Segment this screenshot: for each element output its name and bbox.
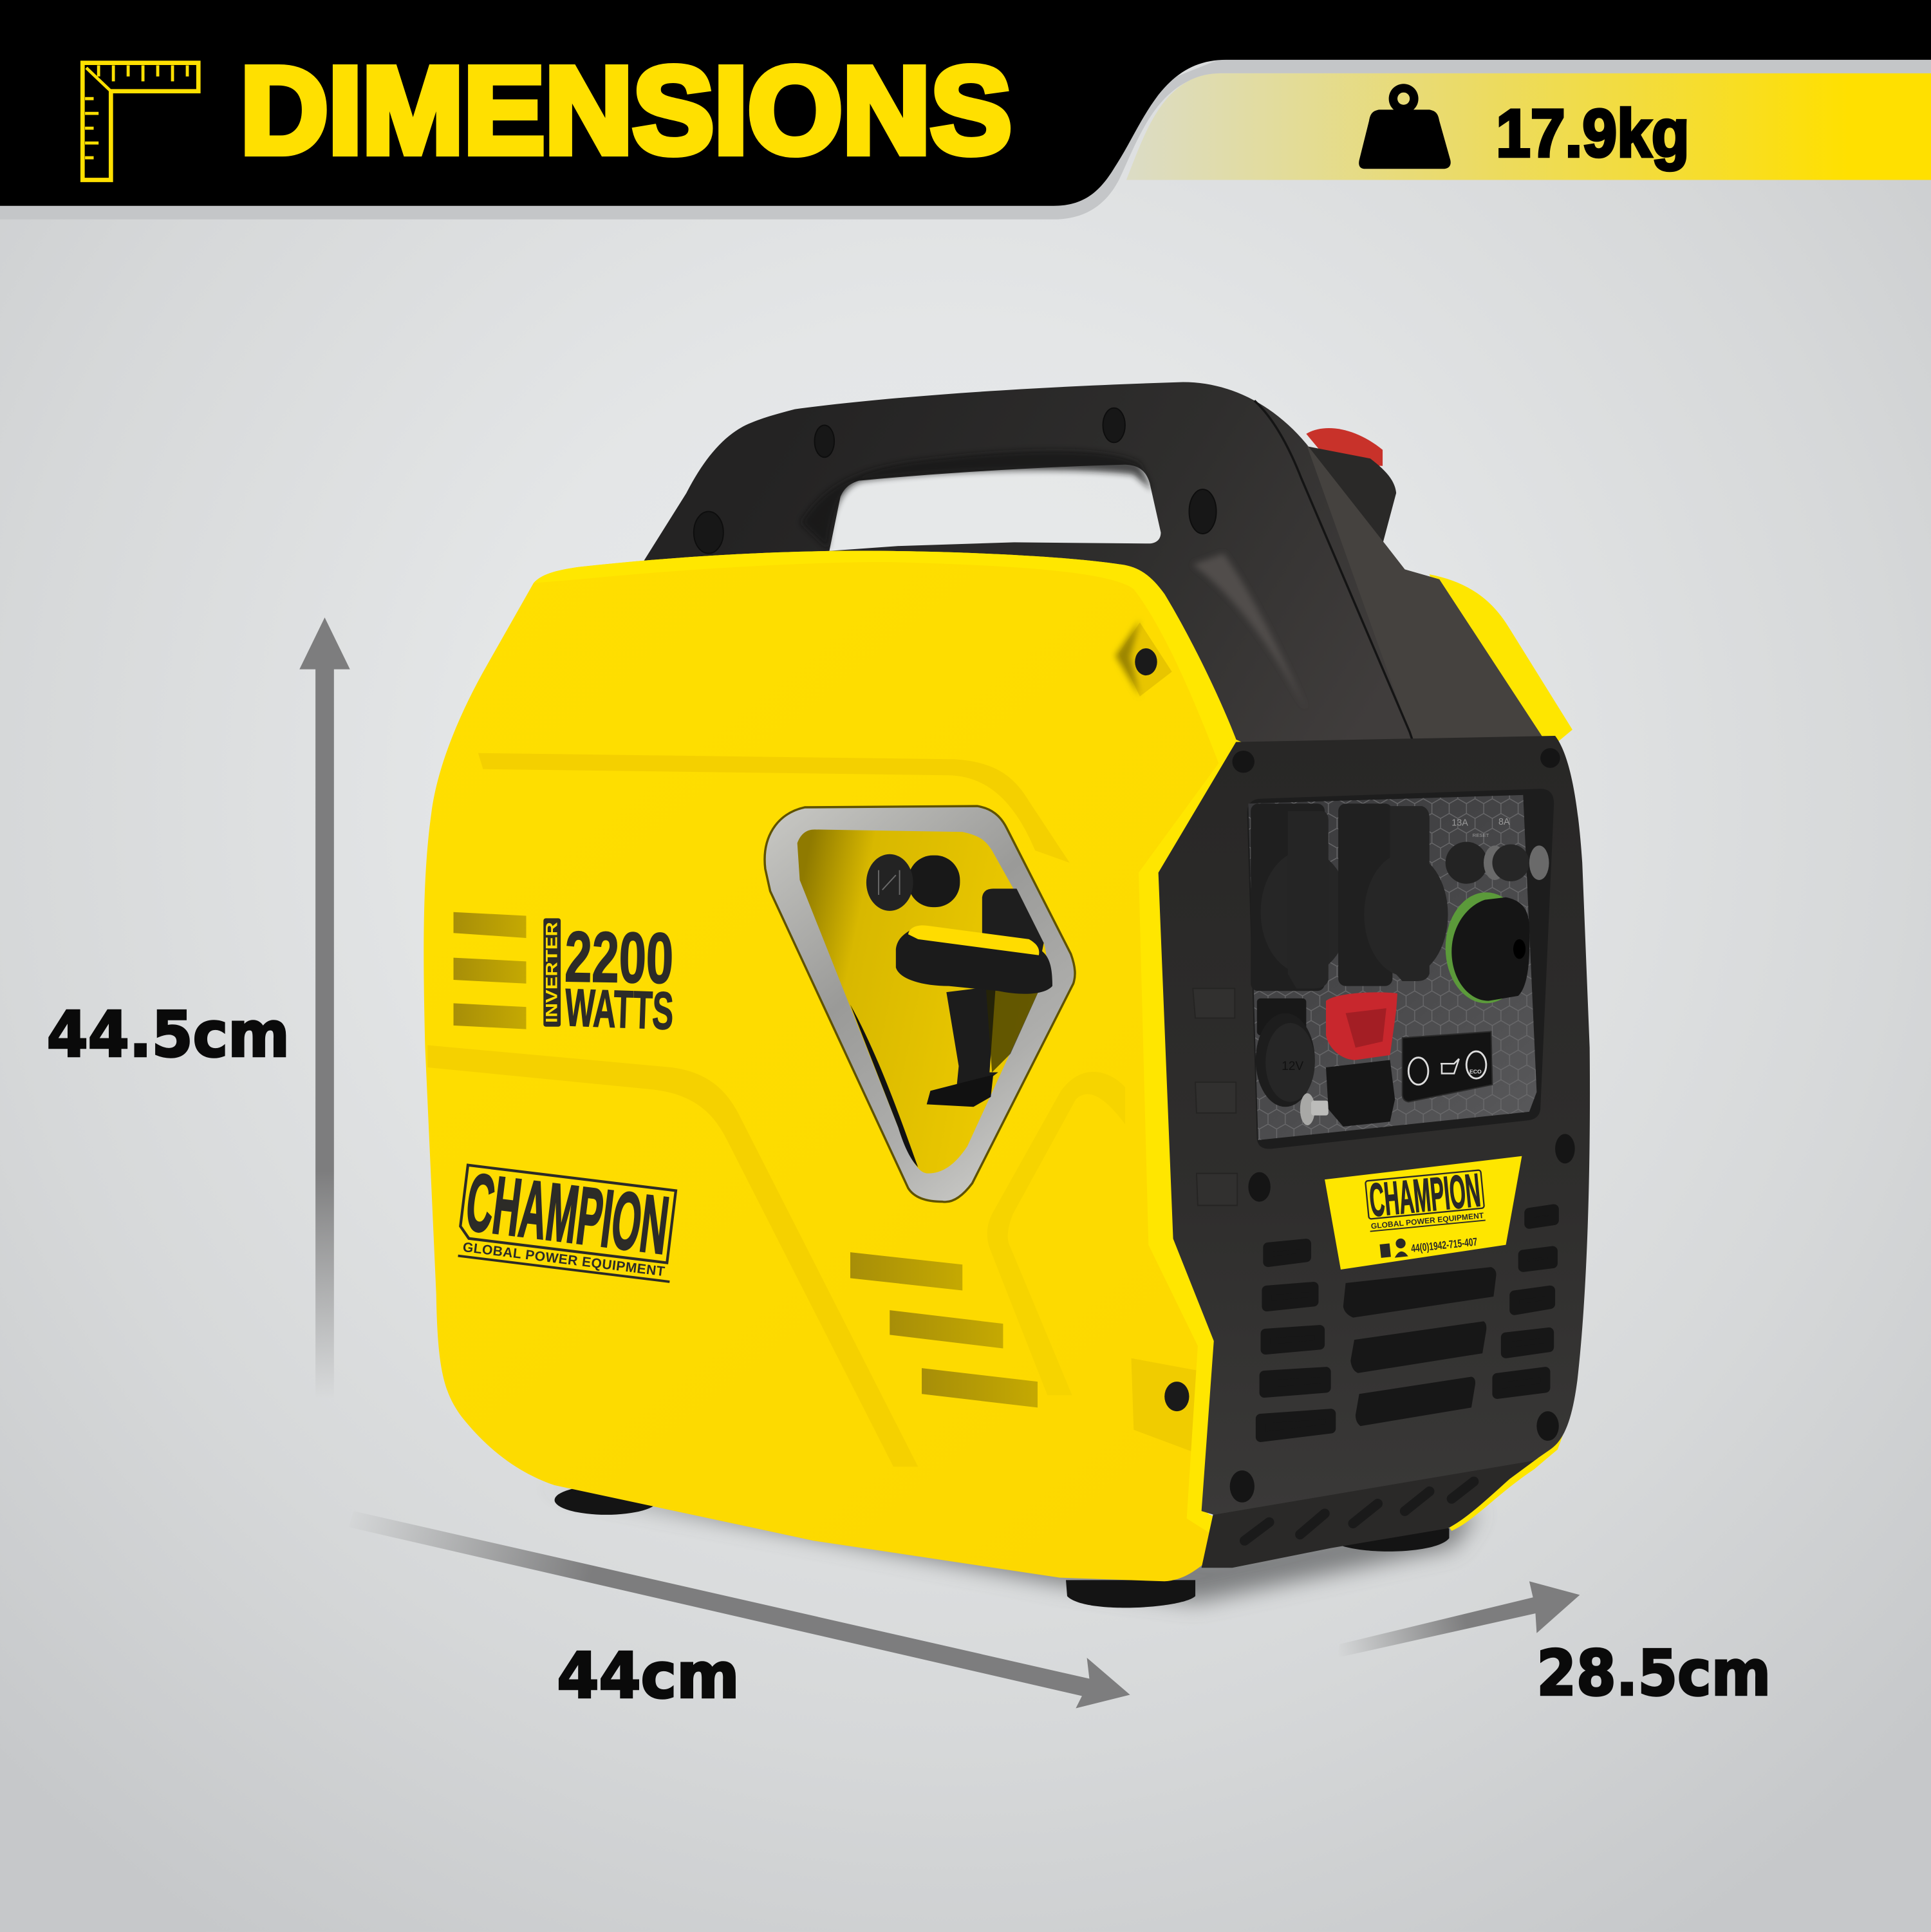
breaker knobs: RESET bbox=[1473, 832, 1489, 838]
panel screws bbox=[1230, 748, 1575, 1503]
bracket behind pull handle bbox=[982, 888, 1044, 955]
inverter badge: INVERTER bbox=[543, 922, 561, 1023]
upper rear housing bbox=[1306, 444, 1549, 747]
arrow: height bbox=[299, 617, 350, 1399]
screw boss upper bbox=[1115, 620, 1172, 697]
red stop button bbox=[1294, 428, 1396, 579]
label: width: 44cm bbox=[557, 1639, 740, 1712]
arrow: depth bbox=[1337, 1581, 1580, 1658]
arrow: width bbox=[349, 1511, 1130, 1708]
floor shadow bbox=[542, 1485, 1479, 1602]
red parallel cap bbox=[1326, 992, 1397, 1060]
rear yellow shell top bbox=[1430, 574, 1572, 742]
window inner shadow bbox=[850, 1004, 918, 1167]
indicator panel: ECO bbox=[1469, 1069, 1482, 1075]
icon: weight bbox=[1359, 84, 1451, 169]
bright edge strip bbox=[1139, 740, 1247, 1535]
front vents left column bbox=[1261, 1244, 1331, 1437]
header black panel bbox=[0, 0, 1931, 206]
breaker knobs: 13A bbox=[1451, 818, 1468, 829]
breaker knobs bbox=[1446, 817, 1549, 884]
breaker knobs: 8A bbox=[1498, 817, 1510, 827]
lower black housing bbox=[1202, 1458, 1538, 1568]
label: height: 44.5cm bbox=[47, 999, 290, 1072]
handle screws bbox=[694, 408, 1217, 554]
helpline: 44(0)1942-715-407 bbox=[1410, 1235, 1478, 1255]
front vents right column bbox=[1497, 1209, 1554, 1394]
generator bbox=[424, 382, 1590, 1608]
front label logo bbox=[1365, 1164, 1486, 1232]
lower relief band bbox=[427, 1046, 918, 1467]
indicator panel bbox=[1403, 1031, 1492, 1102]
upper relief band bbox=[478, 753, 1070, 863]
12v outlet bbox=[1256, 999, 1315, 1107]
weight value: 17.9kg bbox=[1496, 96, 1690, 171]
champion side logo: GLOBAL POWER EQUIPMENT bbox=[462, 1240, 666, 1279]
generator: CHAMPION bbox=[462, 1156, 673, 1271]
panel side ribs bbox=[1193, 988, 1237, 1205]
header banner bbox=[0, 0, 1931, 220]
engine switch bbox=[1446, 892, 1529, 1003]
ridge highlight bbox=[1193, 554, 1306, 710]
recoil pull handle bbox=[896, 925, 1052, 1107]
handle and top housing bbox=[641, 382, 1549, 755]
seam bbox=[1255, 400, 1415, 747]
recoil window interior bbox=[798, 829, 1047, 1174]
header grey edge bbox=[0, 59, 1931, 220]
socket left bbox=[1251, 803, 1349, 991]
title: DIMENSIONS bbox=[240, 41, 1012, 179]
lighter top edge bbox=[534, 551, 1238, 767]
black parallel cap bbox=[1326, 1060, 1395, 1127]
feet bbox=[555, 1485, 1449, 1608]
control plate bbox=[1248, 795, 1536, 1140]
right relief band bbox=[987, 1072, 1125, 1395]
front vents centre bbox=[1343, 1267, 1497, 1426]
control recess bbox=[1247, 789, 1554, 1149]
screw boss lower bbox=[1131, 1358, 1198, 1452]
12v outlet: 12V bbox=[1282, 1060, 1303, 1073]
socket right bbox=[1338, 803, 1448, 986]
side vents upper bbox=[454, 912, 526, 1029]
generator: CHAMPION bbox=[1367, 1164, 1482, 1226]
champion side logo bbox=[457, 1156, 682, 1282]
helpline bbox=[1379, 1230, 1478, 1259]
watts word: WATTS bbox=[564, 978, 675, 1041]
front panel bbox=[1159, 736, 1590, 1515]
icon: set square ruler bbox=[82, 63, 198, 180]
ground bolt bbox=[1300, 1093, 1329, 1125]
choke knob bbox=[866, 854, 960, 911]
handle underside shadow bbox=[801, 451, 1152, 549]
front label logo: GLOBAL POWER EQUIPMENT bbox=[1370, 1211, 1484, 1231]
rear yellow shell bottom bbox=[1417, 1436, 1563, 1531]
weight strip bbox=[1126, 73, 1931, 180]
yellow front label bbox=[1325, 1156, 1522, 1270]
yellow side shell bbox=[424, 551, 1238, 1581]
wattage: 2200 bbox=[564, 916, 674, 999]
label: depth: 28.5cm bbox=[1536, 1637, 1771, 1710]
side vents lower bbox=[850, 1252, 1038, 1407]
recoil window chrome frame bbox=[765, 806, 1075, 1202]
